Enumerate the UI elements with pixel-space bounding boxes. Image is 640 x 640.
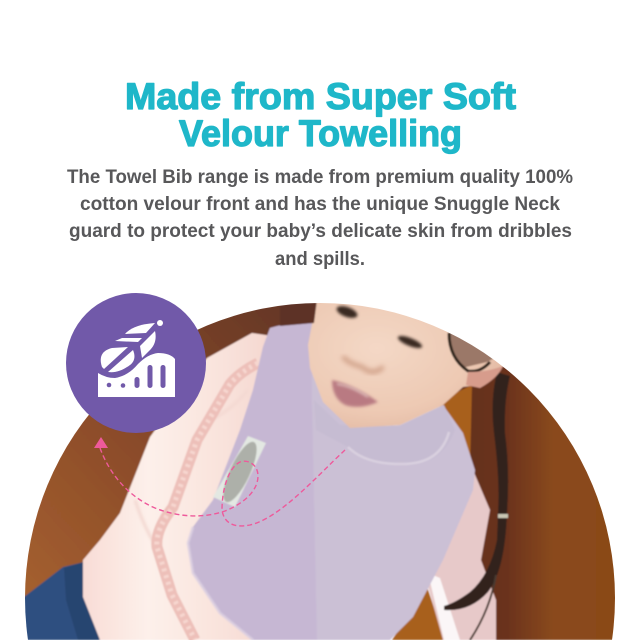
description text [67, 167, 573, 270]
pile dots and bars [107, 365, 166, 388]
shirt sleeve [82, 332, 268, 640]
bib label tag [213, 436, 266, 507]
description text: guard to protect your baby’s delicate skin from dribbles [69, 221, 572, 242]
title: Velour Towelling [179, 113, 462, 154]
ear [466, 366, 503, 388]
nose shadow [344, 358, 382, 372]
jeans [25, 562, 82, 640]
title [125, 76, 516, 154]
snuggle neck guard [443, 404, 446, 408]
sleeve folds [134, 500, 152, 540]
face [308, 295, 505, 428]
sleeve ruffle [157, 363, 258, 640]
wood floor left [25, 306, 282, 598]
right sleeve [427, 470, 496, 640]
feather [101, 320, 163, 372]
bib [268, 324, 476, 640]
bib left strap [188, 323, 317, 640]
title: Made from Super Soft [125, 76, 516, 117]
wood floor right [440, 340, 630, 640]
velour pile block [98, 353, 175, 397]
eye left [335, 304, 359, 320]
mouth [332, 380, 378, 407]
description text: cotton velour front and has the unique Snuggle Neck [80, 194, 560, 215]
photo: child wearing towel bib [20, 295, 630, 640]
hair braid [444, 372, 510, 610]
hair by ear [448, 332, 493, 368]
bib stitched edge [188, 527, 253, 640]
description text: The Towel Bib range is made from premium quality 100% [67, 167, 573, 188]
icon badge: feather on velour [66, 293, 206, 433]
eye right [396, 333, 424, 351]
description text: and spills. [275, 249, 365, 270]
wood behind face [280, 300, 317, 326]
arrow head [94, 437, 108, 448]
dashed pink arrow path [100, 448, 345, 526]
